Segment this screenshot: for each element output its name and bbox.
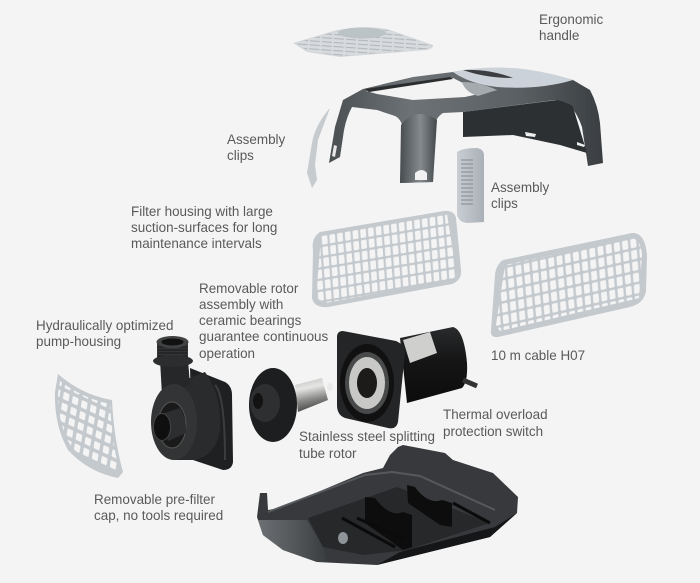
label: left assembly clips: clips: [227, 148, 254, 163]
peg: [338, 532, 348, 544]
leg slot: [415, 170, 427, 180]
opening: [366, 78, 497, 100]
rear rim: [365, 77, 453, 92]
filter housing grille: [312, 211, 461, 307]
outlet: [162, 408, 186, 441]
label: cable: 10 m cable H07: [491, 348, 585, 363]
label: rotor assembly: ceramic bearings: [199, 313, 302, 328]
front face: [151, 384, 197, 460]
label: tube rotor: Stainless steel splitting: [299, 429, 435, 444]
front wall: [377, 513, 517, 565]
right assembly clip: [457, 148, 484, 223]
base tray: [257, 445, 518, 565]
rim highlight: [268, 472, 495, 512]
neck: [160, 360, 190, 395]
cut-outs: [525, 132, 585, 147]
left assembly clip: [307, 108, 330, 188]
label: pre-filter: Removable pre-filter: [94, 492, 215, 507]
label: rotor assembly: Removable rotor: [199, 281, 298, 296]
flange: [337, 331, 405, 428]
pump housing: [151, 336, 233, 470]
motor body: [400, 327, 467, 403]
handle inner panel: [463, 100, 587, 153]
drum: [174, 372, 220, 460]
label: tube rotor: tube rotor: [299, 446, 357, 461]
handle front leg: [400, 114, 437, 183]
tray floor: [308, 487, 490, 555]
back plate: [190, 368, 233, 470]
ribs: [342, 503, 490, 547]
motor label: [403, 332, 437, 363]
tray left floor: [258, 520, 327, 562]
rotor: [249, 368, 333, 442]
label: thermal switch: protection switch: [443, 424, 543, 439]
label: right assembly clips: Assembly: [491, 180, 549, 195]
bearing cradles: [365, 497, 412, 550]
label: rotor assembly: assembly with: [199, 297, 283, 312]
cable: [463, 380, 477, 386]
label: pre-filter: cap, no tools required: [94, 508, 223, 523]
label: ergonomic handle: Ergonomic: [539, 12, 603, 27]
top grille: [293, 27, 433, 57]
label: left assembly clips: Assembly: [227, 132, 285, 147]
label: pump housing: Hydraulically optimized: [36, 318, 173, 333]
label: filter housing: Filter housing with large: [131, 204, 273, 219]
threaded pipe: [157, 342, 188, 358]
label: pump housing: pump-housing: [36, 334, 121, 349]
pre-filter cap: [55, 374, 123, 478]
label: right assembly clips: clips: [491, 196, 518, 211]
top cap: [453, 68, 573, 88]
cable side grille: [491, 233, 647, 337]
label: ergonomic handle: handle: [539, 28, 579, 43]
label: thermal switch: Thermal overload: [443, 407, 548, 422]
label: filter housing: maintenance intervals: [131, 236, 262, 251]
label: rotor assembly: operation: [199, 346, 255, 361]
ergonomic handle: [329, 68, 603, 183]
label: rotor assembly: guarantee continuous: [199, 329, 329, 344]
motor: [337, 327, 477, 428]
label: filter housing: suction-surfaces for long: [131, 220, 277, 235]
